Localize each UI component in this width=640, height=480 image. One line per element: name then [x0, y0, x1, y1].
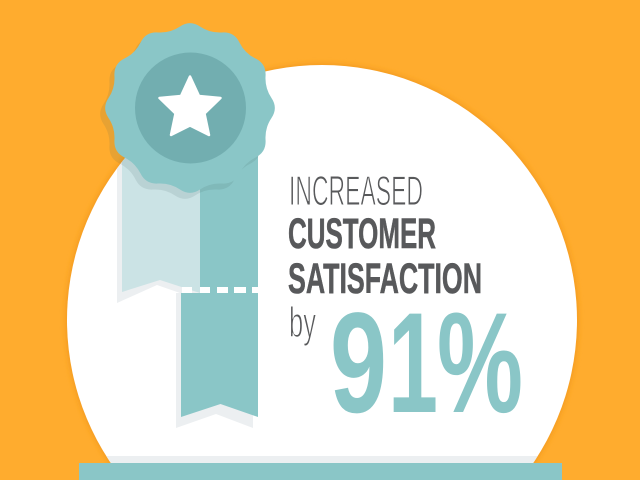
- heading: satisfaction: SATISFACTION: [288, 255, 482, 303]
- ribbon: light left tail: [117, 158, 200, 303]
- heading: increased: INCREASED: [289, 167, 423, 214]
- heading: customer: CUSTOMER: [288, 210, 436, 258]
- white circle panel: [66, 64, 578, 480]
- ribbon: lower tail: [176, 293, 258, 428]
- ribbon stitching: [182, 287, 258, 293]
- base bar: [79, 463, 562, 480]
- ribbon: upper right band: [200, 140, 258, 293]
- text: by: by: [289, 299, 316, 347]
- badge shadow: [100, 29, 270, 199]
- statistic: 91%: %: [437, 284, 523, 443]
- base shadow strip: [100, 456, 544, 463]
- statistic: 91%: [330, 284, 523, 443]
- statistic: 91%: 9: [330, 284, 387, 443]
- badge inner circle: [135, 52, 246, 164]
- icon: star: [160, 76, 220, 135]
- statistic: 91%: 1: [388, 284, 438, 443]
- badge rosette: [105, 23, 275, 193]
